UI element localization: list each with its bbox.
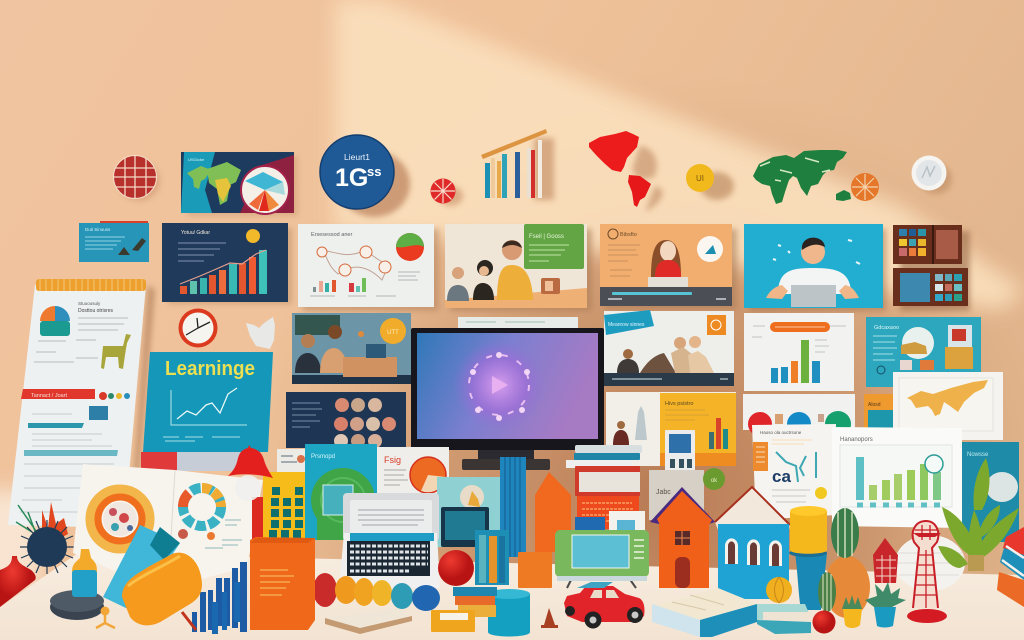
card: classroom people with green panel [445, 224, 592, 311]
card: teal box behind plant [962, 442, 1019, 542]
card: small orange tile [864, 394, 893, 429]
icon: blue badge [320, 134, 410, 217]
card: orange video player [600, 224, 737, 309]
card: small white note [277, 449, 305, 472]
small cactus [818, 572, 836, 612]
blue bar blocks [192, 562, 247, 634]
panel: brown photo frames [893, 225, 970, 311]
teal and yellow bottle [50, 549, 104, 620]
blue cylinder [488, 589, 530, 636]
icon: orange ball [851, 173, 879, 201]
icon: red lamp [228, 445, 273, 552]
white and blue toy house [715, 487, 790, 599]
laptop [339, 493, 440, 588]
monitor [411, 328, 604, 470]
small model building [665, 430, 695, 472]
card: Learning chart poster: Learninge [165, 358, 255, 380]
succulent yellow pot [842, 595, 862, 628]
icon: yellow button: UI [696, 174, 704, 183]
right ring chart [178, 488, 242, 548]
card: orange video player: Bibsfto [620, 232, 637, 238]
card: ca paper: Haoso ola ouctrsone [760, 430, 802, 435]
orange toy house [650, 487, 715, 588]
card: white pie note: Fsig [384, 455, 401, 465]
white vase [895, 535, 965, 591]
plant: green leaves [938, 458, 1019, 571]
icon: red wall clock [178, 308, 218, 348]
card: yellow with tower: Hivs psistro [665, 401, 693, 407]
card: classroom photo [292, 313, 411, 384]
grey bin with green badge: ok [711, 478, 718, 484]
icon: orange wooden house [518, 472, 571, 588]
card: ca paper: ca [772, 467, 791, 486]
card: yellow grid [263, 472, 319, 539]
card: teal photo collage [866, 317, 981, 387]
row of colored balls [313, 573, 440, 611]
icon: red ball [438, 550, 474, 586]
icon: blue badge: Lieurt1 [344, 152, 370, 162]
grey bin with green badge: Jabc [656, 489, 671, 496]
grey bin with green badge [649, 468, 725, 520]
card: green bar chart paper: Hananopors [840, 437, 873, 443]
card: white network diagram [298, 224, 439, 311]
icon: red americas map [589, 131, 663, 212]
card: small orange tile: Alosd [868, 402, 881, 408]
desk surface [0, 553, 1024, 640]
icon: red flower [430, 178, 463, 206]
icon: red grid globe [114, 156, 160, 201]
potted cactus [824, 508, 870, 618]
card: teal and green circle: Prsmopd [311, 454, 335, 460]
calendar poster: Tannact / Joart [31, 393, 68, 399]
dark tablet [441, 507, 489, 547]
card: teal and green circle [305, 444, 377, 540]
card: teal tag with two people [604, 310, 734, 386]
icon: red ornament [0, 556, 36, 607]
red toy car [564, 582, 644, 628]
calendar poster: Stuooosuly [78, 301, 101, 306]
succulent blue pot [865, 582, 906, 628]
card: bar chart with orange banner [744, 313, 854, 391]
stacked books on desk [757, 604, 811, 634]
books at right edge [997, 527, 1024, 607]
card: classroom photo: UTT [387, 330, 399, 336]
icon: pencils on shelf [481, 129, 554, 200]
card: world map and clock [181, 152, 298, 216]
icon: yellow button [686, 164, 734, 200]
icon: blue badge: ss [367, 164, 381, 179]
icon: white plate [912, 156, 952, 194]
card: green bar chart paper [832, 427, 962, 528]
card: navy bar chart [162, 223, 292, 304]
orange pillow block [122, 553, 202, 630]
card: circles icons [743, 394, 855, 437]
card: teal box behind plant: Nowsse [967, 452, 989, 458]
card: teal behind tablet [437, 477, 501, 547]
card: navy bar chart: Yotuu/ Gdkar [181, 230, 210, 236]
orange box [250, 537, 315, 630]
cylinder yellow and blue [789, 506, 827, 610]
open book infographic [73, 464, 263, 590]
card: small teal note: Duti Sinouss [85, 227, 111, 232]
white book on desk [325, 608, 412, 634]
card: teal tag with two people: Meanrow sinnes [608, 322, 645, 328]
card: strip above monitor [458, 317, 578, 329]
card: map on white [893, 372, 1003, 440]
green tablet [555, 530, 649, 588]
calendar poster: Dosttou otrisres [78, 308, 114, 314]
card: yellow with tower [606, 392, 736, 466]
small cone figure [541, 608, 558, 628]
small orange figure [96, 606, 115, 628]
card: white pie note [377, 447, 449, 495]
left ring chart [91, 490, 149, 548]
model red lattice tower [907, 521, 947, 623]
yellow box with label [431, 610, 475, 632]
plant: spiky sea urchin [16, 502, 74, 574]
icon: blue badge: 1G [335, 164, 368, 192]
icon: green world map [753, 150, 851, 204]
card: world map and clock: USGlobe [188, 157, 205, 162]
icon: red apple [812, 610, 836, 634]
card: teal person with laptop [744, 224, 886, 311]
blue and orange book [475, 530, 509, 585]
card: Learning chart poster [141, 352, 273, 471]
card: small teal note [79, 221, 149, 262]
card: teal photo collage: Gdcaxaoo [874, 325, 899, 331]
calendar poster [8, 279, 155, 528]
card: classroom people with green panel: Fseil | Gooss [529, 234, 564, 240]
model red tower small [873, 538, 898, 583]
stack of books [566, 445, 645, 537]
icon: paper heart [246, 317, 275, 349]
card: white network diagram: Ersesessod aner [311, 232, 352, 238]
monitor glow [453, 339, 545, 431]
textbook stack box [652, 588, 757, 637]
book prism teal [103, 525, 180, 610]
book stack small [453, 587, 497, 617]
card: ca paper [752, 424, 836, 520]
card: navy faces grid [286, 392, 406, 448]
icon: yellow fruit [766, 577, 792, 603]
blue stack of files [500, 457, 526, 557]
